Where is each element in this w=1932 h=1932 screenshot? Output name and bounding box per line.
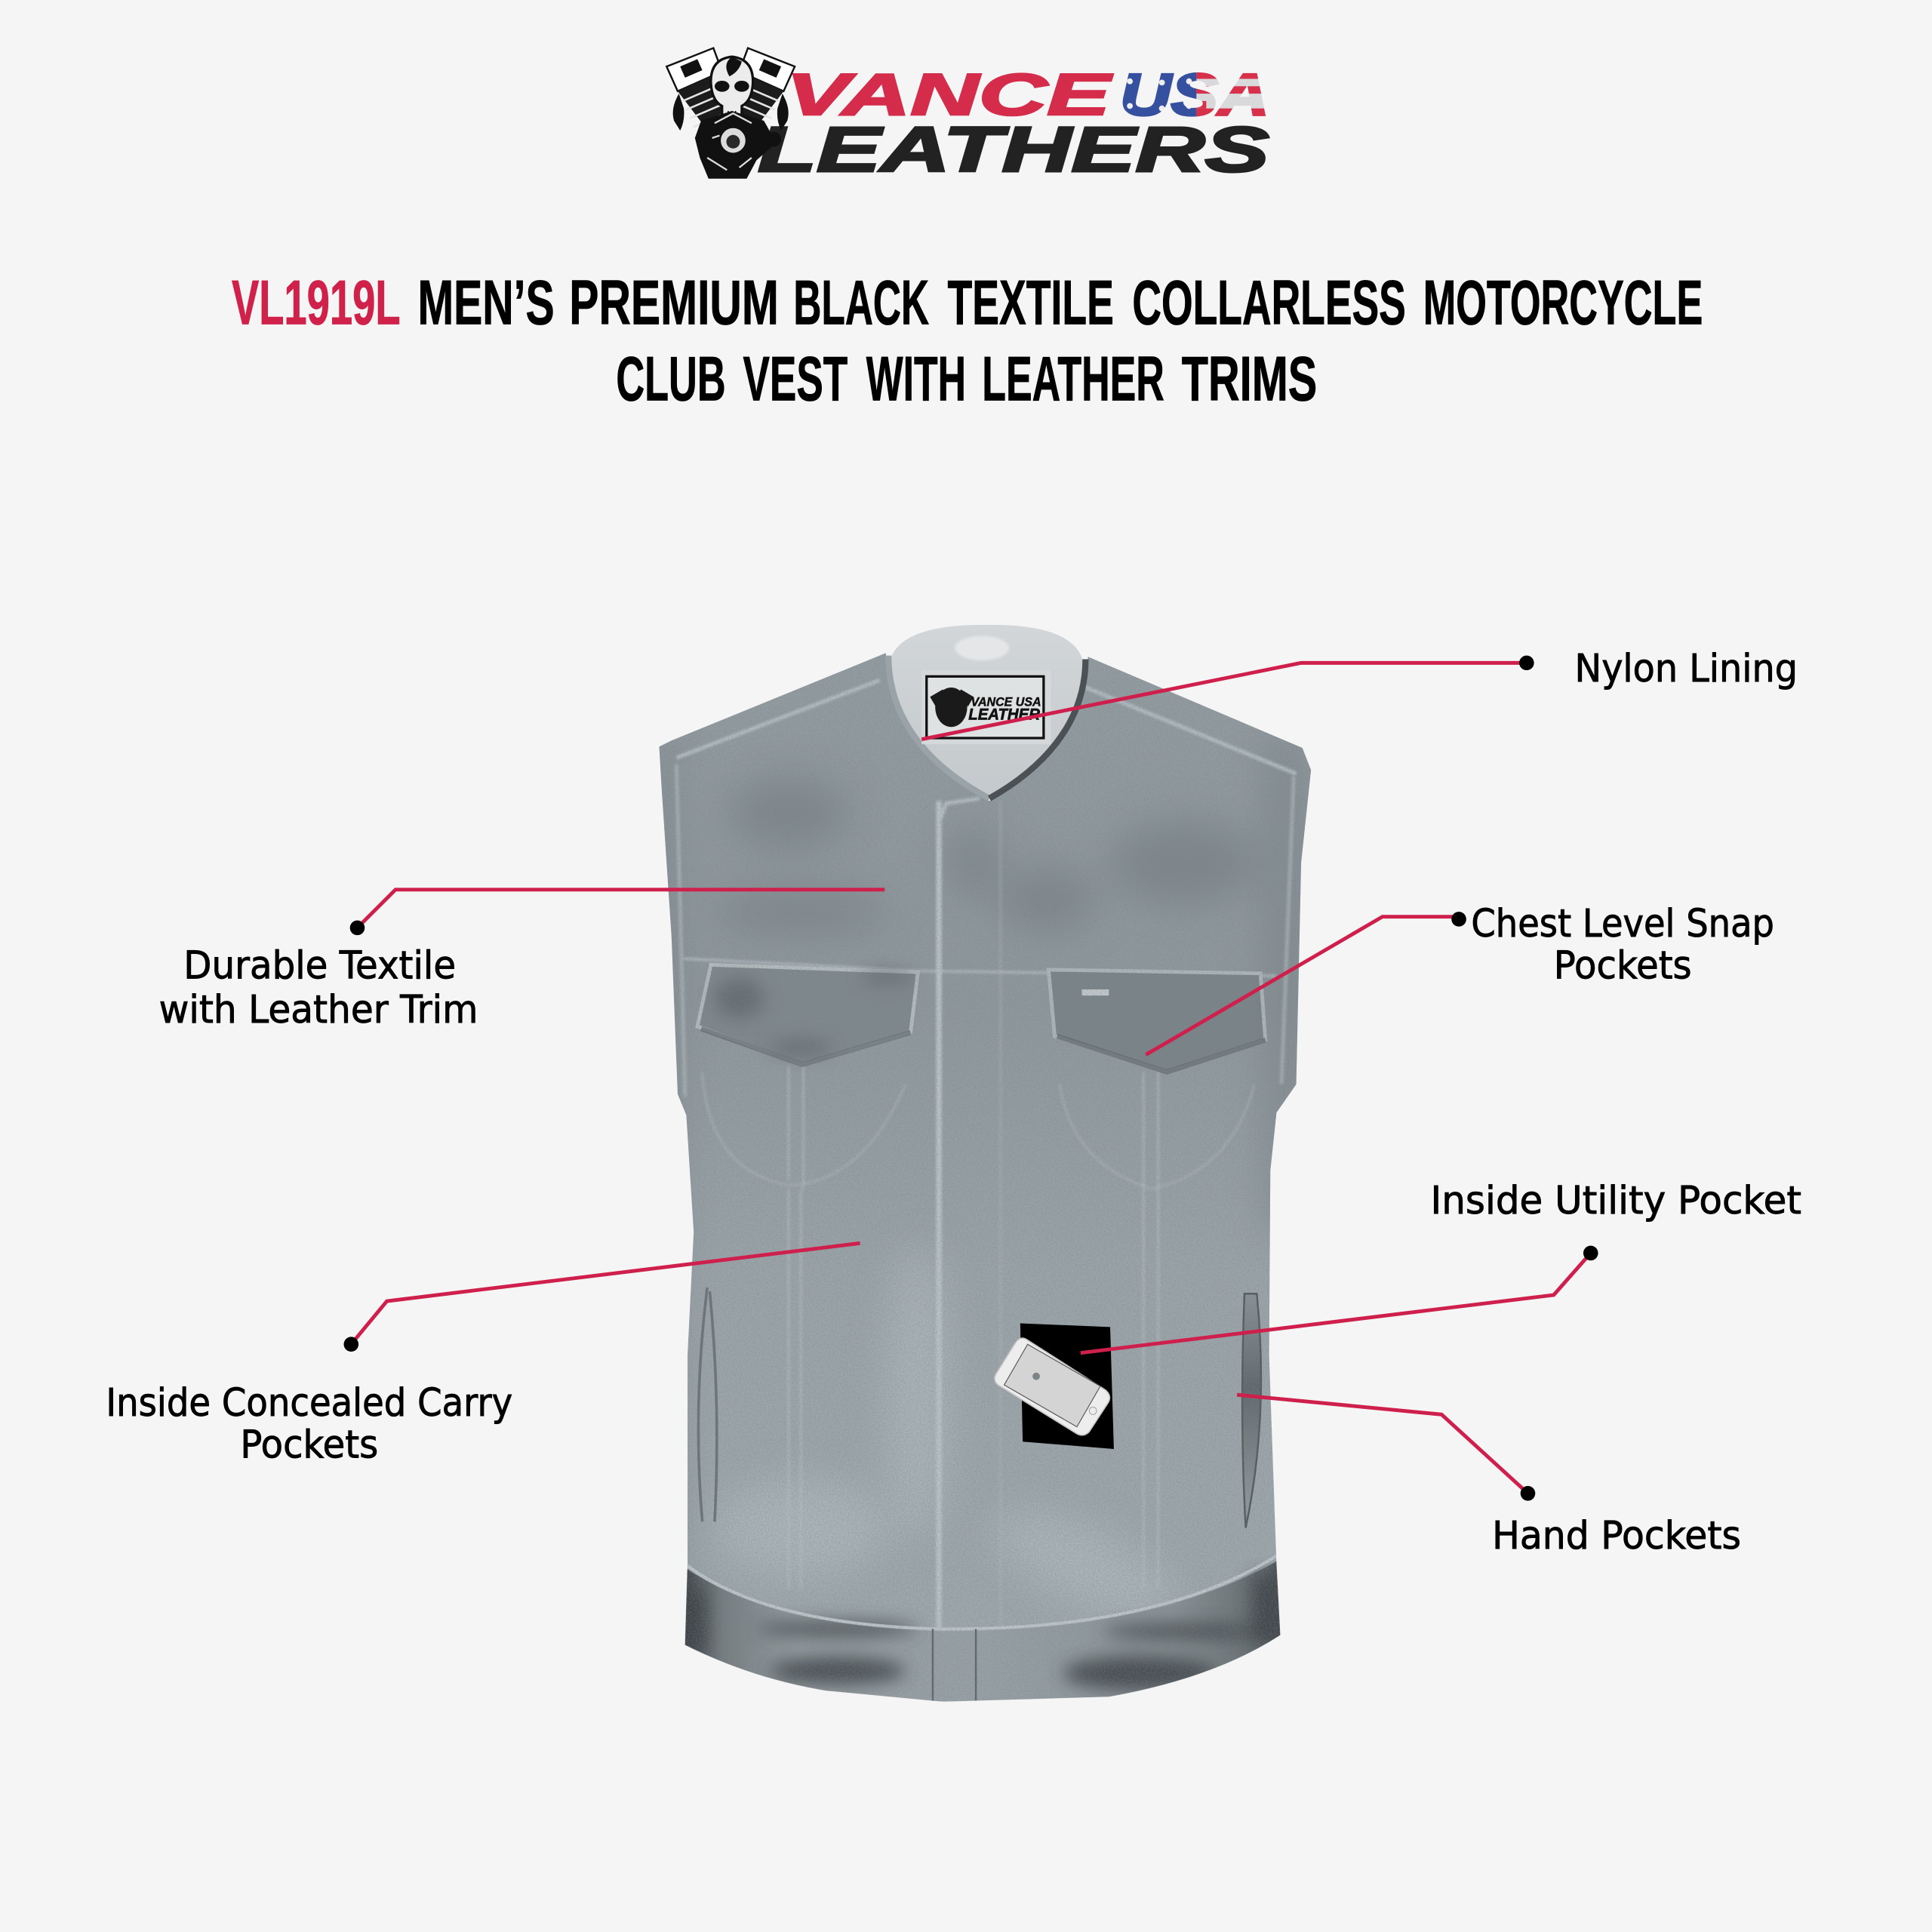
callout: durable textile: with Leather Trim (159, 987, 478, 1032)
vest body (653, 616, 1318, 1712)
right hand pocket (1242, 1294, 1261, 1527)
title: second line: CLUB (616, 344, 726, 414)
lining highlight (955, 635, 1009, 660)
logo word: VANCE: VANCE (786, 61, 1113, 128)
title: second line: LEATHER (982, 344, 1164, 414)
vest illustration (653, 616, 1318, 1712)
collar trim left (888, 656, 989, 798)
left chest pocket flap (697, 964, 918, 1065)
logo: Vance USA Leathers (666, 48, 1269, 185)
left hand pocket (698, 1287, 717, 1521)
title: second line: WITH (866, 344, 966, 414)
inside utility pocket and phone (995, 1323, 1114, 1449)
woven neck label: LEATHER (968, 706, 1041, 723)
collar trim right (989, 659, 1085, 798)
callout: nylon lining: Nylon Lining (1575, 646, 1798, 691)
callout: concealed carry pockets: Pockets (240, 1422, 378, 1466)
callout: inside utility pocket: Inside Utility Pocket (1431, 1178, 1801, 1223)
title: first line: TEXTILE (948, 267, 1114, 337)
callout: hand pockets: Hand Pockets (1492, 1513, 1741, 1558)
texture noise (653, 616, 1318, 1712)
title: first line: MOTORCYCLE (1423, 267, 1703, 337)
title: first line: COLLARLESS (1132, 267, 1406, 337)
callout: concealed carry pockets (106, 1243, 860, 1466)
nylon lining (888, 625, 1084, 798)
title: product code: VL1919L (232, 267, 401, 337)
title: first line: BLACK (793, 267, 929, 337)
callout: chest pockets: Chest Level Snap (1471, 901, 1774, 946)
logo word: USA: USA (1120, 61, 1269, 128)
title: first line (417, 267, 1703, 337)
title: first line: PREMIUM (569, 267, 779, 337)
callout: durable textile (159, 890, 884, 1032)
title: second line: VEST (743, 344, 848, 414)
right chest pocket flap (1048, 970, 1266, 1072)
title: first line: MEN’S (417, 267, 555, 337)
logo word: LEATHERS: LEATHERS (758, 113, 1269, 185)
stitching and seams (676, 680, 1297, 1629)
woven neck label: VANCE USA (971, 696, 1041, 709)
callout: nylon lining (921, 646, 1798, 740)
callout: inside utility pocket (1081, 1178, 1801, 1353)
woven neck label (921, 670, 1051, 744)
callout: hand pockets (1237, 1395, 1741, 1558)
title: second line: TRIMS (1182, 344, 1317, 414)
callout: durable textile: Durable Textile (183, 943, 456, 987)
callout: chest pockets (1146, 901, 1774, 1055)
callout: chest pockets: Pockets (1554, 943, 1692, 987)
title: second line (616, 344, 1317, 414)
bottom leather band (685, 1561, 1280, 1701)
title (232, 267, 1703, 414)
icon: v-twin engine with skull (666, 48, 795, 179)
callout: concealed carry pockets: Inside Concealed Carry (106, 1380, 512, 1425)
